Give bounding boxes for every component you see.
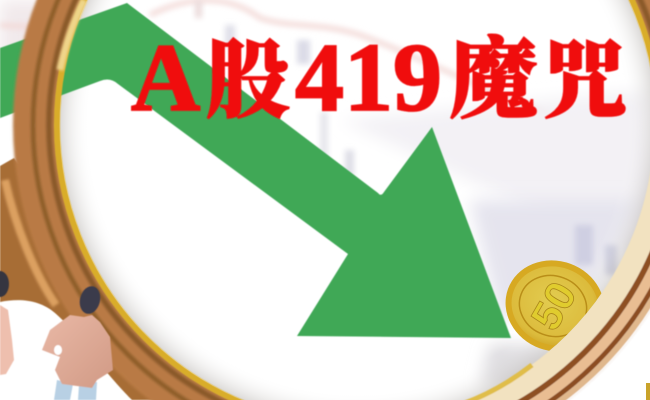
partial person: jacket: [0, 305, 14, 375]
title: A: [131, 24, 200, 131]
frame: mount highlight streak: [5, 180, 56, 305]
man: jacket: [42, 315, 113, 388]
frame: lower left handle mount: [0, 158, 160, 400]
man: trousers: [54, 380, 97, 400]
title: 咒: [543, 14, 627, 135]
frame: gold tint at bottom of polished band: [465, 365, 532, 400]
icon: gold 50 coin: 50: [522, 274, 586, 338]
frame: cream highlight at top of rim: [60, 0, 84, 70]
figure: partial person at left edge: [0, 271, 14, 375]
frame: lower right polished bands: [477, 174, 650, 400]
arrow: green downward trend: [0, 3, 511, 338]
title: 魔: [449, 10, 537, 136]
man: arm gap: [54, 345, 62, 355]
icon: gold 50 coin: [506, 260, 602, 351]
man: head: [77, 284, 103, 316]
figure: man in pink jacket: [42, 284, 113, 400]
partial person: head: [0, 271, 9, 297]
title: 股: [206, 14, 290, 135]
title: 419: [295, 24, 442, 132]
small gold edge fragment: [646, 383, 650, 400]
